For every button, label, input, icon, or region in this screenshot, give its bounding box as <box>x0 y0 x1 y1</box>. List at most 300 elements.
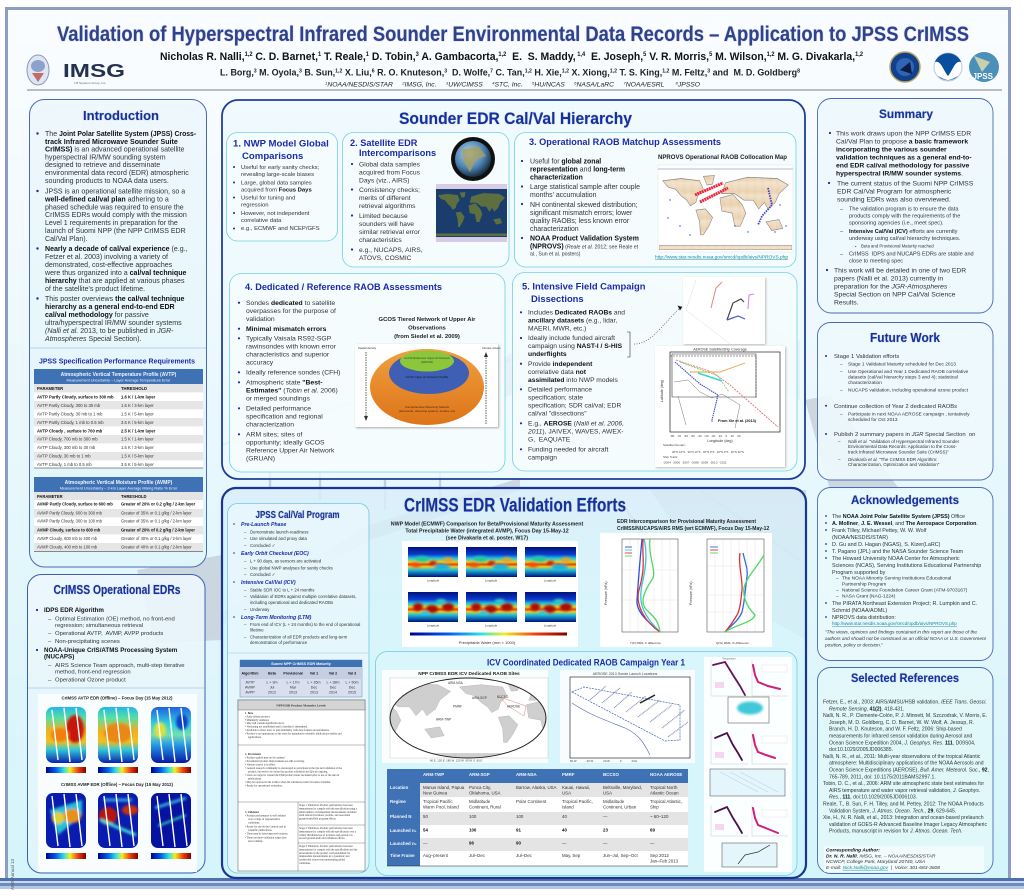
caption: GCOS figure: Observations <box>408 326 447 332</box>
table: AVMP requirements: AVMP Cloudy, 600 mb to 400 mb <box>37 536 98 541</box>
table: Suomi NPP CrIMSS EDR maturity: Provisional <box>283 672 303 676</box>
text: operational EDR bullets: Operational Ozone product <box>55 678 126 684</box>
author list: 5 <box>709 52 713 58</box>
icon: IMSG logo: IMSG <box>63 61 125 81</box>
map: ICV dedicated RAOB sites: ARM-NSA <box>448 681 464 685</box>
figure: GCOS tiered network ellipses: Comprehensive Observing Network <box>405 405 450 409</box>
text: introduction bullets: cal/val methodology for passive <box>45 312 149 319</box>
text: panel 4 bullets: Sondes dedicated to satellite <box>246 300 335 307</box>
table: AVMP requirements: Greater of 40% or 0.1 g/kg / 2-km layer <box>121 544 192 550</box>
table: AVMP requirements: PARAMETER <box>37 494 63 499</box>
text: introduction bullets: track Infrared Microwave Sounder Suite <box>45 139 178 146</box>
text: acknowledgements list: Program supported by <box>832 570 886 576</box>
text: summary bullets: products comply with the requirements of the <box>849 213 960 219</box>
text: summary bullets: Beta and Provisional Maturity reached <box>861 243 934 248</box>
table: ICV campaign sites: Midlatitude <box>469 799 491 804</box>
table: AVTP requirements: 2.5 K / 1-km layer <box>121 428 156 433</box>
text: summary bullets <box>826 130 974 306</box>
heading: panel 5: 5. Intensive Field Campaign <box>522 280 646 292</box>
text: acknowledgements list: NASA Grant (NAG-1224) <box>842 593 896 599</box>
table: Suomi NPP CrIMSS EDR maturity: 2013 <box>310 690 318 694</box>
table: AVMP requirements: AVMP Cloudy, 400 mb to 100 mb <box>37 544 98 550</box>
text: summary bullets: EDR Cal/Val Program for atmospheric <box>837 188 952 195</box>
text: panel 3 bullets: months' accumulation <box>530 192 597 199</box>
author list: T. S. King, <box>617 68 662 78</box>
table: NPP EDR product maturity levels: • Available to allow users to gain familiarity with data formats and parameters. <box>245 729 330 732</box>
table: AVMP requirements: Greater of 20% or 0.2 g/kg / 2-km layer <box>121 502 196 507</box>
text: panel 4 bullets: (GRUAN) <box>246 455 275 462</box>
table: ICV campaign sites: Atlantic Ocean <box>650 790 679 796</box>
table: AVTP requirements: 1.5 K / 5-km layer <box>121 454 154 458</box>
text: panel 4 bullets: opportunity; ideally GCOS <box>246 439 325 446</box>
table: Suomi NPP CrIMSS EDR maturity: 2014 <box>329 690 337 694</box>
figure: GCOS tiered network ellipses: (Aerosonde, observing systems, Sondes, etc) <box>399 409 455 413</box>
table: ICV campaign sites: ARM-TWP <box>423 772 444 777</box>
table: Suomi NPP CrIMSS EDR maturity: Dec <box>330 686 336 690</box>
text: summary bullets: preparation for the JGR-Atmospheres <box>834 283 947 290</box>
text: corresponding author: NCWCP, College Park, Maryland 20740, USA <box>826 859 925 865</box>
table: ICV campaign sites: Launched n₂ <box>390 841 417 846</box>
text: panel 5 bullets: campaign using NAST-I / S-HIS <box>528 343 622 350</box>
text: Cal/Val phases: – <box>244 530 247 534</box>
text: Cal/Val phases: – <box>244 558 247 564</box>
text: references: Remote Sensing, 41(2), 418-431. <box>829 706 904 712</box>
text: panel 3 bullets: NH continental skewed distribution; <box>530 202 638 209</box>
text: introduction bullets: of the satellite's product lifetime. <box>45 286 145 293</box>
text: panel 4 bullets <box>238 300 340 462</box>
text: acknowledgements list: The NOAA Joint Polar Satellite System (JPSS) Office <box>832 514 965 520</box>
text: panel 3 bullets: characterization <box>530 174 583 181</box>
text: future work bullets: Nalli et al. "Validation of Hyperspectral Infrared Sounder <box>848 439 959 444</box>
table: Suomi NPP CrIMSS EDR maturity: Val 1 <box>310 672 318 676</box>
text: panel 5 bullets: Ideally include funded aircraft <box>528 335 615 342</box>
map: NPROVS collocation map <box>658 165 793 252</box>
text: corresponding author: E-mail: Nick.Nalli@noaa.gov | Voice: 301-683-3608 <box>826 866 940 871</box>
text: introduction bullets: designed to retrieve and disseminate <box>45 162 160 169</box>
table: AVTP requirements: AVTP Cloudy, 30 mb to 1 mb <box>37 454 91 458</box>
text: corresponding author: Corresponding Author: <box>826 848 880 854</box>
text: panel 3 bullets: characterization <box>530 226 579 233</box>
text: acknowledgements list <box>824 514 987 648</box>
table: NPP EDR product maturity levels: small number of independent measurements obtained <box>299 811 357 814</box>
text: introduction bullets: The <box>45 131 59 138</box>
text: panel 5 bullets: correlative data not <box>528 369 586 376</box>
text: future work bullets: – <box>840 388 843 394</box>
text: introduction bullets: environmental data record (EDR) atmospheric <box>45 170 189 177</box>
bottom stripes <box>0 878 1024 889</box>
table: AVMP requirements: AVMP Partly Cloudy, surface to 600 mb <box>37 502 113 507</box>
panel: 3. Operational RAOB Matchup Assessments <box>514 132 796 267</box>
text: panel 1 bullets <box>233 165 320 232</box>
author list: D. Wolfe, <box>447 68 490 78</box>
table: Suomi NPP CrIMSS EDR maturity: Val 2 <box>329 672 337 676</box>
author list: 1,2 <box>562 68 569 74</box>
table: ICV campaign sites: 23 <box>603 828 608 832</box>
heading: Introduction: Introduction <box>83 108 159 123</box>
text: panel 5 bullets: Provide independent <box>528 361 592 368</box>
map: ICV dedicated RAOB sites: 60 E 120 E 180 W 120 W 60 W 0 60 E <box>430 758 483 762</box>
figure: precipitable water maps: Longitude <box>544 578 557 582</box>
table: AVTP requirements: AVTP Partly Cloudy, 1 mb to 0.5 mb <box>37 420 104 425</box>
author list: NASA/LaRC <box>576 82 623 88</box>
author list: V. R. Morris, <box>646 51 709 63</box>
heading: panel 5: Dissections <box>531 293 584 304</box>
map: ICV dedicated RAOB sites <box>382 670 548 763</box>
author list: 6 <box>574 80 577 86</box>
figure: campaign sonde profiles: Temperature <box>722 658 736 660</box>
icon: seal logo <box>27 55 49 85</box>
table: NPP EDR product maturity levels: • Versioning not established until a baseline is determined. <box>245 726 308 729</box>
chart: RMS temperature and water vapour profiles: Q(%) RMS, % difference <box>716 641 749 645</box>
text: references: atmosphere: Multidisciplinary applications of the NOAA Aerosols and <box>829 761 984 767</box>
text: panel 1 bullets: Useful for early sanity checks; <box>241 165 320 171</box>
text: references: Res., 111, doi:10.1029/2005JD006103. <box>829 795 917 801</box>
map: ICV dedicated RAOB sites: PMRF <box>453 704 462 708</box>
text: panel 1 bullets: Useful for tuning and <box>241 196 295 202</box>
text: operational EDR bullets: – <box>48 616 52 622</box>
table: AVTP requirements: 1.5 K / 3-km layer <box>121 403 154 408</box>
table: NPP EDR product maturity levels: independent measurements in a systematic and <box>299 855 350 858</box>
table: AVTP requirements: PARAMETER <box>37 386 63 391</box>
table: ICV campaign sites: Sep 2012 <box>650 853 669 858</box>
text: operational EDR bullets: method, front-end regression <box>55 670 131 676</box>
table: NPP EDR product maturity levels: • Product quality may not be optimal <box>245 756 285 760</box>
table: ICV campaign sites: 96 <box>469 840 474 846</box>
text: Cal/Val phases: – <box>244 607 247 612</box>
text: Cal/Val phases: Use global NWP analyses for sanity checks <box>250 565 333 570</box>
text: panel 1 bullets: acquired from Focus Days <box>241 187 312 193</box>
text: panel 1 bullets: e.g., ECMWF and NCEP/GFS <box>241 226 320 232</box>
table: Suomi NPP CrIMSS EDR maturity: Dec <box>311 686 317 690</box>
figure: GCOS tiered network ellipses <box>355 344 501 427</box>
author list: 1,2 <box>245 52 253 58</box>
author list: 5 <box>643 52 647 58</box>
text: summary bullets: Cal/Val Plan to propose a basic framework <box>836 138 968 145</box>
table: NPP EDR product maturity levels: demonstrated to comply with the specification and the <box>299 848 358 851</box>
figure: AEROSE satellite and ship coverage: AEROSE Satellite/Ship Coverage <box>693 348 747 352</box>
table: ICV campaign sites: 90 <box>516 840 521 846</box>
text: panel 2 bullets: retrieval algorithms <box>359 203 416 210</box>
chart: RMS temperature and water vapour profiles: Pressure (hPa) <box>689 581 693 605</box>
text: panel 3 bullets: al., Sun et al. posters) <box>530 252 581 258</box>
text: introduction bullets: were thus organized into a cal/val technique <box>45 270 186 277</box>
text: operational EDR bullets: Optimal Estimation (OE) method, no front-end <box>55 616 175 622</box>
text: Cal/Val phases: – <box>244 594 247 599</box>
text: operational EDR bullets: – <box>48 678 52 684</box>
text: future work bullets: Stage 1 Validation efforts <box>834 354 899 360</box>
table: ICV campaign sites: Oklahoma, USA <box>469 790 501 796</box>
text: Cal/Val phases: – <box>244 572 247 577</box>
panel: 2. Satellite EDR Intercomparisons <box>342 132 509 267</box>
text: summary bullets: validation techniques as a general end-to- <box>836 154 972 161</box>
text: summary bullets: – <box>840 229 844 235</box>
author list: UW/CIMSS <box>448 82 492 88</box>
heading: panel 4: 4. Dedicated / Reference RAOB Assessments <box>245 281 442 292</box>
figure: AEROSE satellite and ship coverage: Ship Track: <box>663 455 678 459</box>
text: references: Ocean Science Expedition 2004, J. Geophys. Res. 111, D09S04, <box>829 740 975 746</box>
text: operational EDR bullets: IDPS EDR Algorithm <box>44 607 104 614</box>
table: ICV campaign sites: 54 <box>423 828 428 832</box>
table: NPP EDR product maturity levels: scientific publications. <box>248 829 273 832</box>
caption: GCOS figure: GCOS Tiered Network of Upper Air <box>379 317 476 323</box>
table: ICV campaign sites: 100 <box>469 828 477 832</box>
author list: 3 <box>707 68 710 74</box>
text: panel 5 bullets: MAERI, MWR, etc.) <box>528 326 586 332</box>
text: acknowledgements list: Frank Tilley, Michael Pettey, W. W. Wolf <box>832 528 927 534</box>
icon: IMSG logo: I M Systems Group, Inc. <box>74 81 106 85</box>
heading: panel 2: 2. Satellite EDR <box>350 138 418 148</box>
text: introduction bullets: Atmospheres Special Section). <box>45 336 141 343</box>
text: panel 4 bullets: Reference Upper Air Network <box>246 447 335 454</box>
author list: R. O. Knuteson, <box>375 68 444 78</box>
table: NPP EDR product maturity levels: product, but need to be aware that product validation and QA are ongoing. <box>248 770 328 774</box>
table: AVTP requirements: Measurement Uncertainty – Layer Average Temperature Error <box>67 378 171 382</box>
table: NPP EDR product maturity levels: 2. Provisional <box>245 753 261 756</box>
text: introduction bullets: CrIMSS) is an advanced operational satellite <box>45 147 184 154</box>
text: acknowledgements list: position, policy or decision." <box>824 642 883 648</box>
figure: AEROSE satellite and ship coverage: Satellite Domain: <box>663 443 686 447</box>
panel: Selected References <box>818 668 993 874</box>
caption: NPROVS map: NPROVS Operational RAOB Collocation Map <box>658 155 787 161</box>
table: NPP EDR product maturity levels: widely distributed set of locations and periods via <box>299 834 353 837</box>
table: ICV campaign sites: 40 <box>562 828 567 832</box>
text: references: Fetzer, E., et al., 2003: AIRS/AMSU/HSB validation, IEEE Trans. Geosci. <box>823 700 987 706</box>
text: panel 3 bullets: Large statistical sample after couple <box>530 184 640 191</box>
text: introduction bullets: (Nalli et al. 2013, to be published in JGR- <box>45 328 174 335</box>
text: panel 3 bullets: (NPROVS) (Reale et al. 2012; see Reale et <box>530 244 638 250</box>
author list: 8 <box>675 80 679 86</box>
text: future work bullets: Environmental Data Records: Application to the Cross- <box>848 444 957 449</box>
text: Cal/Val phases: – <box>244 543 247 548</box>
text: summary bullets: close to meeting spec <box>849 258 903 264</box>
table: ICV campaign sites: Location <box>390 785 409 790</box>
table: ICV campaign sites: — <box>650 840 655 846</box>
table: NPP EDR product maturity levels: uncertainties in the product well established via <box>299 852 351 855</box>
text: operational EDR bullets: – <box>48 663 52 669</box>
text: panel 4 bullets: Detailed performance <box>246 405 311 412</box>
text: panel 4 bullets: rawinsondes with known error <box>246 344 337 351</box>
map: ICV dedicated RAOB sites: BCCSO <box>497 695 509 699</box>
figure: precipitable water maps: Longitude <box>485 578 498 582</box>
text: references: Nalli, N. R., et al., 2011: Multi-year observations of the tropical Atlantic <box>823 754 981 760</box>
author list: 1 <box>366 52 370 58</box>
icon: NOAA logo <box>934 53 962 81</box>
table: ICV campaign sites: Time Frame <box>390 853 415 858</box>
text: acknowledgements list: National Science Foundation Career Grant (ATM-9703167) <box>842 587 968 593</box>
table: Suomi NPP CrIMSS EDR maturity: Algorithm <box>242 672 258 676</box>
text: operational EDR bullets: Operational AVTP, AVMP, AVPP products <box>55 631 163 637</box>
text: panel 4 bullets: characteristics and superior <box>246 352 330 359</box>
chart: RMS temperature and water vapour profiles: Pressure (hPa) <box>604 581 608 605</box>
table: ICV campaign sites: Launched n₁ <box>390 828 417 833</box>
table: ICV campaign sites <box>387 769 688 866</box>
figure: GCOS tiered network ellipses: Spatial density <box>358 346 377 350</box>
text: future work bullets: – <box>838 439 841 444</box>
icon: JPSS logo <box>969 52 999 82</box>
table: NPP EDR product maturity levels: next column). <box>248 840 263 843</box>
text: acknowledgements list: A. Mollner, J. E. Wessel, and The Aerospace Corporation. <box>832 521 978 527</box>
text: Cal/Val phases: Concluded ✓ <box>250 572 275 577</box>
author list: 5 <box>532 80 535 86</box>
table: NPP EDR product maturity levels: • Early release product. <box>245 715 270 718</box>
figure: GCOS tiered network ellipses: Climate drivers <box>482 346 501 350</box>
table: ICV campaign sites: Barrow, Alaska, USA <box>516 785 557 790</box>
figure: GCOS tiered network ellipses: GCOS Reference Upper Air Network <box>404 356 450 360</box>
text: panel 2 bullets: Global data samples <box>359 161 421 168</box>
heading: JPSS specification requirements: JPSS Specification Performance Requirements <box>39 356 195 366</box>
text: introduction bullets: sounding products to NOAA data users. <box>45 178 169 185</box>
table: AVTP requirements: AVTP Cloudy, 1 mb to 0.5 mb <box>37 462 92 467</box>
panel: Acknowledgements <box>818 488 993 660</box>
table: Suomi NPP CrIMSS EDR maturity: AVTP <box>245 680 255 684</box>
text: panel 1 bullets: Large, global data samples <box>241 180 312 186</box>
text: future work bullets <box>825 354 975 467</box>
heading: panel 1: Comparisons <box>242 151 303 162</box>
text: summary bullets: sponsoring agencies (i.e., meet spec). <box>849 220 944 226</box>
table: Suomi NPP CrIMSS EDR maturity: 2013 <box>289 690 297 694</box>
table: AVTP requirements <box>34 369 203 468</box>
map: ICV dedicated RAOB sites: NPP CrIMSS EDR ICV Dedicated RAOB Sites <box>418 671 520 677</box>
text: references: AIRS temperature and water vapor retrieval validation, J. Geophys. <box>829 788 980 794</box>
table: ICV campaign sites: Warm Pool, Island <box>423 804 459 810</box>
text: Cal/Val phases: Concluded ✓ <box>250 543 275 548</box>
table: AVTP requirements: AVTP Cloudy, 700 mb to 300 mb <box>37 437 98 442</box>
table: NPP EDR product maturity levels: demonstrated to comply with the specification over a <box>299 830 357 833</box>
figure: CrIMSS AVTP and AVMP EDR maps: CrIMSS AVTP EDR (Offline) – Focus Day (15 May 2012) <box>62 696 173 700</box>
heading: Future Work: Future Work <box>870 330 941 345</box>
author list: C. D. Barnet, <box>253 51 318 63</box>
text: panel 4 bullets: validation <box>246 316 275 323</box>
text: summary bullets: Intensive Cal/Val (ICV) <box>849 229 908 235</box>
author list: M. Wilson, <box>712 51 767 63</box>
text: introduction bullets: Cal/Val Plan). <box>45 236 88 243</box>
text: introduction bullets: Nearly a decade of cal/val experience <box>45 246 170 253</box>
text: summary bullets: – <box>840 206 844 212</box>
text: panel 3 bullets: NOAA Product Validation System <box>530 236 639 242</box>
table: NPP EDR product maturity levels: • Ready for operational evaluation. <box>245 784 283 788</box>
table: NPP EDR product maturity levels: • Product performance is well defined <box>245 814 286 818</box>
figure: AEROSE satellite and ship coverage: -80 -70 -60 -50 -40 -30 -20 -10 0 10 20 <box>670 434 741 438</box>
table: AVTP requirements: AVTP Cloudy , surface to 700 mb <box>37 428 103 433</box>
text: introduction bullets: demonstrated, cost-effective approaches <box>45 262 173 269</box>
table: NPP EDR product maturity levels: several ground-truth and validation efforts. <box>299 837 345 840</box>
text: introduction bullets: Joint Polar Satellite System (JPSS) Cross- <box>59 131 197 138</box>
text: summary bullets: Special Section on NPP Cal/Val Science <box>834 291 956 298</box>
text: summary bullets: underway using cal/val hierarchy techniques. <box>849 236 961 242</box>
table: ICV campaign sites: Jan–Feb 2013 <box>650 858 679 864</box>
chart: RMS temperature and water vapour profiles <box>600 533 772 647</box>
author list: 3 <box>299 68 302 74</box>
text: panel 5 bullets: 2011), JAIVEX, WAVES, AWEX- <box>528 428 624 436</box>
text: acknowledgements list: Schmid (NOAA/AOML) <box>832 608 887 614</box>
text: future work bullets: datasets (cal/val hierarchy steps 3 and 4); statistical <box>848 374 958 380</box>
table: AVMP requirements: Atmospheric Vertical Moisture Profile (AVMP) <box>65 480 173 486</box>
author list: 2 <box>401 80 405 86</box>
figure: AEROSE satellite and ship coverage <box>655 346 785 467</box>
text: panel 2 bullets: characteristics <box>359 237 402 244</box>
author list: STC, Inc. <box>494 82 532 88</box>
author list: D. Tobin, <box>369 51 416 63</box>
table: NPP EDR product maturity levels: Stage 2 Validation: Product performance has been <box>299 827 353 830</box>
text: panel 5 bullets: E.g., AEROSE (Nalli et al. 2006, <box>528 420 624 428</box>
table: ICV campaign sites: Ship <box>650 804 659 810</box>
text: introduction bullets: the cal/val technique <box>115 296 185 303</box>
author list: 1,2 <box>498 52 507 58</box>
text: introduction bullets: Level 1 requirements in preparation for the <box>45 220 178 227</box>
figure: aircraft trajectories <box>683 277 765 344</box>
text: references: measurements for infrared sensor validation during Aerosol and <box>829 734 972 740</box>
table: AVTP requirements: 1.5 K / 1-km layer <box>121 437 154 442</box>
table: ICV campaign sites: Aug–present <box>423 853 449 858</box>
table: AVTP requirements: Atmospheric Vertical Temperature Profile (AVTP) <box>61 372 177 378</box>
text: panel 1 bullets: correlative data <box>241 218 282 224</box>
text: future work bullets: Use Operational and Year 1 Dedicated RAOB correlative <box>848 369 969 375</box>
author list: M. Feltz, <box>669 68 707 78</box>
author list: A. Gambacorta, <box>419 51 498 63</box>
table: AVTP requirements: AVTP Cloudy, 300 mb to 30 mb <box>37 445 96 450</box>
table: NPP EDR product maturity levels: • There may be later improved versions. <box>245 833 288 836</box>
table: Suomi NPP CrIMSS EDR maturity: Mar <box>290 686 297 690</box>
panel: Sounder EDR Cal/Val Hierarchy <box>222 100 805 479</box>
author list <box>160 51 864 88</box>
table: AVTP requirements: 1.5 K / 3-km layer <box>121 445 154 450</box>
text: summary bullets: sounding EDRs was also overviewed. <box>837 196 951 203</box>
table: NPP EDR product maturity levels: • Minimally validated. <box>245 719 269 722</box>
table: ICV campaign sites: 40 <box>562 814 567 819</box>
table: Suomi NPP CrIMSS EDR maturity: AVMP <box>245 686 256 690</box>
table: NPP EDR product maturity levels: over a range of representative <box>248 818 281 821</box>
table: AVTP requirements: 1.6 K / 1-km layer <box>121 395 156 400</box>
author list: NOAA/ESRL <box>626 82 675 88</box>
figure: AEROSE satellite and ship coverage: -2004 -2006 -2007 -2008 -2009 -2010 -2011 <box>663 460 727 464</box>
text: panel 4 bullets: ARM sites; sites of <box>246 431 302 438</box>
text: panel 5 bullets: G, EAQUATE <box>528 436 571 444</box>
table: ICV campaign sites: Tropical Atlantic, <box>650 799 682 804</box>
text: Cal/Val phases: – <box>244 536 247 541</box>
text: references: Branch, H. D. Knuteson, and W. F. Feltz, 2006: Ship-based <box>829 727 962 733</box>
author list: B. Sun, <box>302 68 335 78</box>
map: AEROSE 2013 sonde launch locations: 60 W 40 W 20 W 0 20 E <box>570 759 637 763</box>
figure: AEROSE satellite and ship coverage: 30°N 10°S 30°N 10°S 30°N 0°S 30°N 0°S 30°N 20°S <box>672 450 744 454</box>
text: future work bullets: scheduled for Oct 2013 <box>848 417 898 423</box>
heading: panel 2: Intercomparisons <box>359 148 436 158</box>
author list: M. Oyola, <box>257 68 299 78</box>
table: NPP EDR product maturity levels: • General research community is encouraged to participate in the QA and validation of the <box>245 767 343 770</box>
text: references: Tobin, D. C., et al., 2006: ARM site atmospheric state best estimates for <box>823 781 984 787</box>
text: panel 4 bullets: overpasses for the purpose of <box>246 308 336 315</box>
text: Cal/Val phases: demonstration of performance <box>250 640 308 645</box>
link: NPROVS url: http://www.star.nesdis.noaa.gov/smcd/opdb/aivs/NPROVS.php <box>655 254 789 260</box>
heading: ICV campaign: ICV Coordinated Dedicated RAOB Campaign Year 1 <box>487 658 686 668</box>
map: AEROSE 2013 sonde launch locations: AEROSE 2013 Sonde Launch Locations <box>593 672 657 676</box>
table: ICV campaign sites: — <box>423 840 428 846</box>
text: Cal/Val phases: Validation of EDRs against multiple correlative datasets, <box>250 594 356 599</box>
heading: CrIMSS EDR Validation Efforts: CrIMSS EDR Validation Efforts <box>404 496 626 516</box>
text: panel 2 bullets: Consistency checks; <box>359 187 420 194</box>
panel: JPSS Cal/Val Program <box>228 504 369 873</box>
author list: 3 <box>254 68 257 74</box>
table: NPP EDR product maturity levels: conditions. <box>299 862 311 865</box>
table: ICV campaign sites: ARM-NSA <box>516 772 538 777</box>
text: acknowledgements list: D. Gu and D. Hagan (NGAS), S. Kizer(LaRC) <box>832 542 941 548</box>
text: acknowledgements list: authors and should not be construed as an official NOAA or U.S. Government <box>825 636 987 641</box>
text: Cal/Val phases: Use simulated and proxy data <box>250 536 307 541</box>
author list: and M. D. Goldberg <box>710 68 797 78</box>
author list: JPSSO <box>677 82 700 88</box>
author list: 1,2 <box>610 68 617 74</box>
text: references: Validation System, J. Atmos. Ocean. Tech., 29, 629-645. <box>829 808 956 814</box>
map: ICV dedicated RAOB sites: AEROSE <box>507 704 520 708</box>
